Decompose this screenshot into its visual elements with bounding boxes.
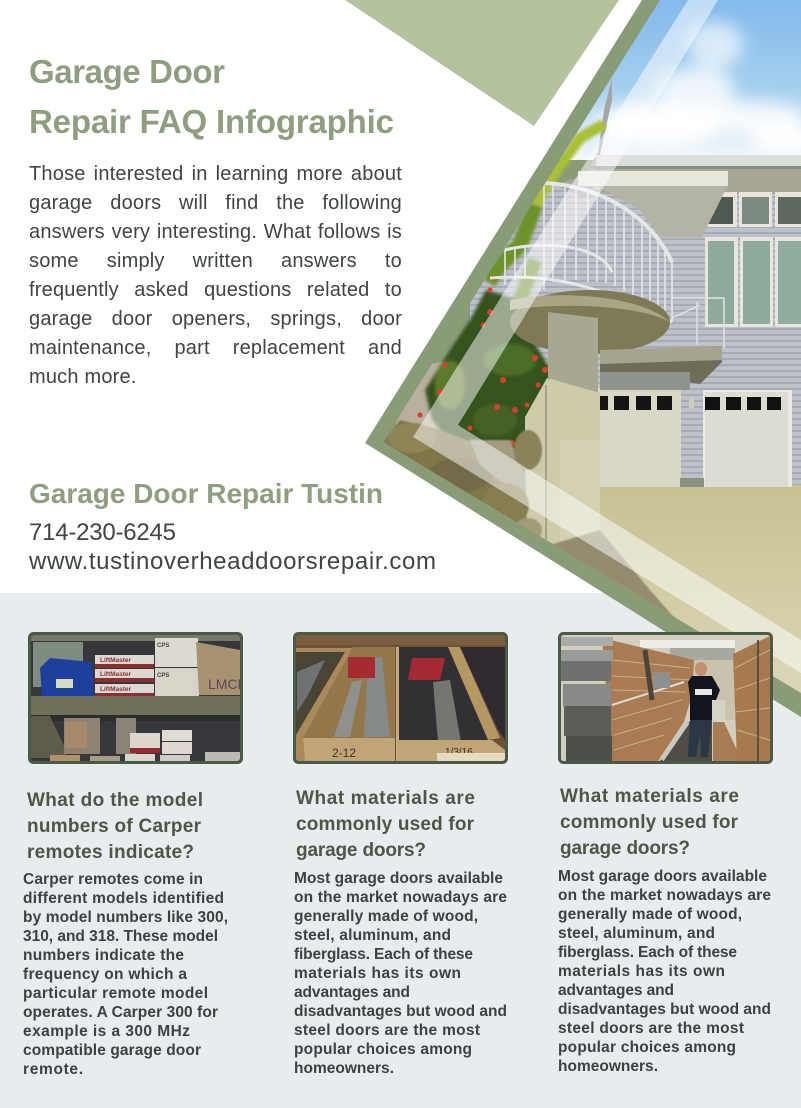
intro paragraph: much more. — [29, 366, 137, 388]
upper windows — [704, 192, 801, 227]
photo: parts shelf: CPS — [157, 643, 169, 649]
question heading: Carper remotes: What do the model — [27, 790, 203, 811]
answer text: materials, column 2 — [294, 870, 507, 1077]
house siding and roof — [470, 78, 801, 485]
plants and flowers — [395, 124, 604, 458]
balcony railing — [490, 183, 672, 322]
photo: hardware boxes: 2-12 — [332, 746, 356, 760]
answer text: materials, column 2: on the market nowadays are — [294, 889, 507, 906]
photo: hardware boxes — [294, 634, 506, 762]
concrete column — [525, 378, 600, 545]
photo: parts shelf: CPS — [157, 673, 169, 679]
intro paragraph: Those interested in learning more about — [29, 163, 402, 185]
photo: parts shelf: LiftMaster — [100, 686, 132, 693]
answer text: Carper remotes: particular remote model — [23, 985, 208, 1002]
question heading: materials, column 3 — [560, 786, 739, 859]
answer text: Carper remotes: by model numbers like 300, — [23, 909, 228, 926]
title: Repair FAQ Infographic — [29, 103, 394, 140]
question heading: Carper remotes — [27, 790, 203, 863]
question heading: materials, column 2: What materials are — [296, 788, 475, 809]
question heading: materials, column 3: garage doors? — [560, 838, 690, 859]
answer text: Carper remotes: 310, and 318. These model — [23, 928, 218, 945]
answer text: Carper remotes — [23, 871, 228, 1078]
top light green triangle — [345, 0, 619, 126]
answer text: materials, column 3: disadvantages but wood and — [558, 1001, 771, 1018]
answer text: Carper remotes: different models identified — [23, 890, 224, 907]
intro paragraph: frequently asked questions related to — [29, 279, 402, 301]
stair rail — [672, 298, 724, 348]
concrete balcony slab and pillar — [510, 290, 722, 393]
answer text: materials, column 3: on the market nowadays are — [558, 887, 771, 904]
question heading: materials, column 3: commonly used for — [560, 812, 739, 833]
answer text: Carper remotes: example is a 300 MHz — [23, 1023, 190, 1040]
answer text: materials, column 2: materials has its own — [294, 965, 461, 982]
question heading: Carper remotes: numbers of Carper — [27, 816, 202, 837]
photo: parts shelf: LiftMaster — [100, 671, 132, 678]
intro paragraph: garage doors will find the following — [29, 192, 402, 214]
question heading: materials, column 2 — [296, 788, 475, 861]
answer text: Carper remotes: Carper remotes come in — [23, 871, 203, 888]
answer text: materials, column 2: steel, aluminum, and — [294, 927, 451, 944]
question heading: materials, column 2: garage doors? — [296, 840, 426, 861]
answer text: Carper remotes: numbers indicate the — [23, 947, 184, 964]
question heading: Carper remotes: remotes indicate? — [27, 842, 194, 863]
answer text: materials, column 3: generally made of wood, — [558, 906, 742, 923]
answer text: materials, column 3: homeowners. — [558, 1058, 658, 1075]
company contact block: www.tustinoverheaddoorsrepair.com — [28, 548, 436, 575]
answer text: materials, column 2: generally made of wood, — [294, 908, 478, 925]
answer text: materials, column 3: materials has its own — [558, 963, 725, 980]
answer text: materials, column 3: steel, aluminum, and — [558, 925, 715, 942]
answer text: materials, column 2: popular choices among — [294, 1041, 472, 1058]
question heading: materials, column 2: commonly used for — [296, 814, 475, 835]
company contact block: Garage Door Repair Tustin — [29, 478, 383, 509]
intro paragraph — [29, 163, 402, 388]
photo: hardware boxes: 1/3/16 — [445, 747, 473, 758]
answer text: Carper remotes: remote. — [23, 1061, 83, 1078]
answer text: materials, column 2: steel doors are the most — [294, 1022, 480, 1039]
house photo — [380, 0, 801, 720]
answer text: materials, column 2: Most garage doors available — [294, 870, 503, 887]
photo: parts shelf: LiftMaster — [100, 657, 132, 664]
intro paragraph: answers very interesting. What follows is — [29, 221, 402, 243]
lower background panel — [0, 593, 801, 1108]
answer text: materials, column 2: advantages and — [294, 984, 410, 1001]
roof overhang — [578, 171, 728, 237]
answer text: materials, column 2: fiberglass. Each of these — [294, 946, 473, 963]
answer text: materials, column 3: Most garage doors available — [558, 868, 767, 885]
driveway — [600, 485, 801, 693]
answer text: materials, column 2: homeowners. — [294, 1060, 394, 1077]
answer text: materials, column 3 — [558, 868, 771, 1075]
intro paragraph: maintenance, part replacement and — [29, 337, 402, 359]
company contact block: 714-230-6245 — [29, 519, 176, 546]
answer text: materials, column 3: fiberglass. Each of these — [558, 944, 737, 961]
answer text: materials, column 3: steel doors are the most — [558, 1020, 744, 1037]
answer text: materials, column 3: advantages and — [558, 982, 674, 999]
company contact block — [28, 478, 436, 575]
intro paragraph: garage door openers, springs, door — [29, 308, 402, 330]
answer text: Carper remotes: compatible garage door — [23, 1042, 201, 1059]
photo: man in truck with door panels — [560, 634, 772, 762]
garage doors — [598, 388, 792, 487]
intro paragraph: some simply written answers to — [29, 250, 402, 272]
answer text: Carper remotes: frequency on which a — [23, 966, 187, 983]
question heading: materials, column 3: What materials are — [560, 786, 739, 807]
rocks — [383, 420, 674, 617]
sky with clouds — [560, 0, 801, 160]
title: Garage Door — [29, 53, 225, 90]
translucent white chevron overlay — [413, 0, 801, 673]
answer text: materials, column 3: popular choices among — [558, 1039, 736, 1056]
dark green chevron frame — [365, 0, 801, 717]
lower windows — [705, 237, 801, 327]
answer text: Carper remotes: operates. A Carper 300 for — [23, 1004, 218, 1021]
photo: parts shelf: LMCP — [208, 676, 247, 692]
answer text: materials, column 2: disadvantages but wood and — [294, 1003, 507, 1020]
title — [29, 53, 394, 140]
photo: parts shelf — [30, 634, 247, 762]
